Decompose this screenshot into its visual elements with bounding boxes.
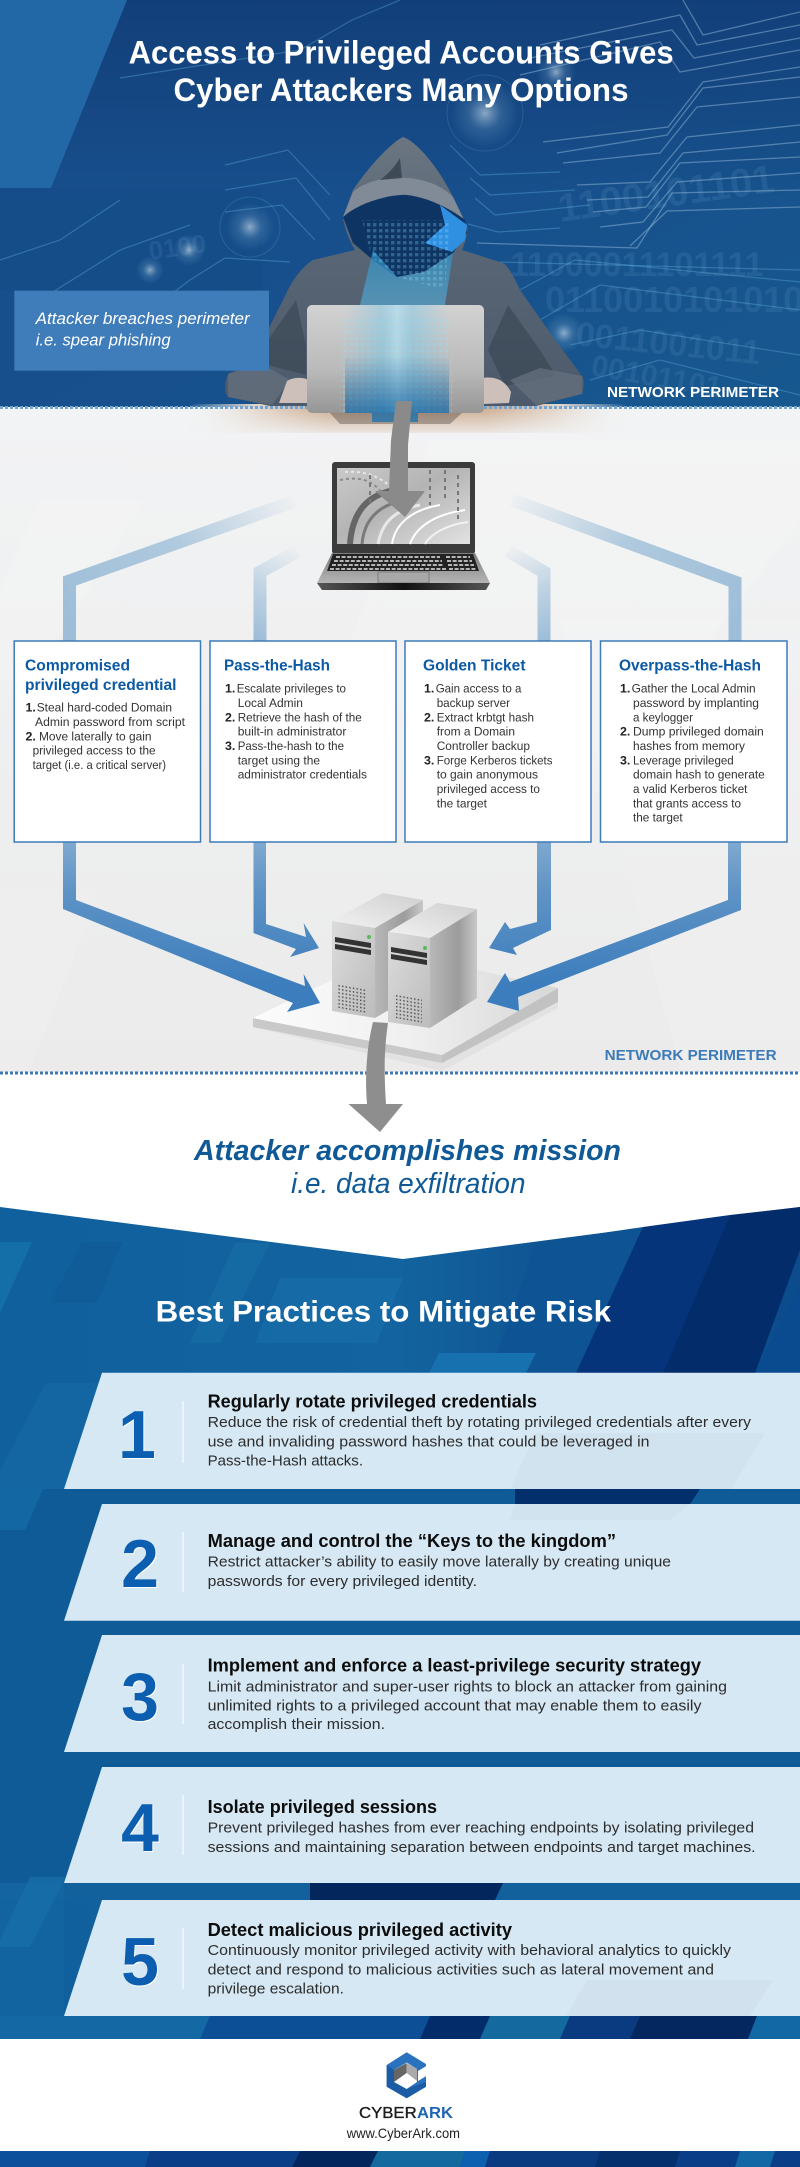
practice text 2: Manage and control the “Keys to the kingdom” xyxy=(208,1531,616,1551)
card heading: Golden Ticket xyxy=(423,658,526,675)
card steps xyxy=(620,682,765,825)
card steps: from a Domain xyxy=(437,725,515,739)
card steps xyxy=(225,682,367,782)
card steps: target using the xyxy=(238,753,320,767)
logo wordmark: CYBER xyxy=(359,2105,417,2122)
divider: bottom network perimeter xyxy=(0,1072,800,1074)
number 3: 3 xyxy=(121,1659,159,1735)
card steps: Pass-the-hash to the xyxy=(238,739,344,753)
practice row 2 xyxy=(64,1504,800,1621)
practice row 1 xyxy=(64,1373,800,1489)
card steps xyxy=(26,701,186,772)
practice text 5 xyxy=(208,1920,732,1998)
card steps: Steal hard-coded Domain xyxy=(37,701,172,715)
card steps: Escalate privileges to xyxy=(237,682,346,696)
practice text 3: accomplish their mission. xyxy=(208,1716,385,1733)
arrow: breach into laptop xyxy=(375,401,425,517)
practice row 3 xyxy=(64,1635,800,1752)
icon: compromised laptop xyxy=(317,462,490,590)
footer strip xyxy=(0,2151,800,2167)
practice text 3 xyxy=(208,1656,727,1733)
card steps: Local Admin xyxy=(238,696,303,710)
hands xyxy=(279,378,309,403)
arrow: exfiltration xyxy=(348,1022,403,1132)
card heading xyxy=(25,658,176,694)
panel: attacker header xyxy=(0,0,800,407)
card heading: privileged credential xyxy=(25,677,176,694)
panel: network interior xyxy=(0,408,800,1072)
card steps: Admin password from script xyxy=(35,715,186,729)
card steps: the target xyxy=(437,796,488,810)
card steps: administrator credentials xyxy=(238,768,367,782)
callout: attacker accomplishes mission: Attacker accomplishes mission xyxy=(193,1135,621,1167)
card steps: target (i.e. a critical server) xyxy=(33,758,166,772)
card steps: built-in administrator xyxy=(238,725,346,739)
card steps: 3. xyxy=(620,753,630,767)
card steps: 2. xyxy=(424,710,434,724)
callout: attacker accomplishes mission: i.e. data exfiltration xyxy=(291,1168,526,1200)
card steps: a valid Kerberos ticket xyxy=(633,782,748,796)
practice text 1: Reduce the risk of credential theft by rotating privileged credentials after every xyxy=(208,1414,752,1431)
icon: hooded hacker at laptop xyxy=(190,137,625,433)
panel: mission area xyxy=(0,1072,800,1212)
server two xyxy=(388,903,477,938)
connectors: laptop to attack cards xyxy=(70,500,735,642)
card steps: 1. xyxy=(26,701,36,715)
card heading: Compromised xyxy=(25,658,130,675)
logo wordmark xyxy=(359,2105,453,2122)
practice text 1: use and invaliding password hashes that could be leveraged in xyxy=(208,1434,650,1451)
card steps: 1. xyxy=(424,682,434,696)
practice text 5: detect and respond to malicious activities such as lateral movement and xyxy=(208,1962,714,1979)
card steps: 1. xyxy=(620,682,630,696)
card steps: 2. xyxy=(620,725,630,739)
heading: best practices: Best Practices to Mitigate Risk xyxy=(156,1296,611,1329)
practice text 1: Pass-the-Hash attacks. xyxy=(208,1453,363,1470)
card: overpass-the-hash xyxy=(600,641,787,842)
laptop lid xyxy=(307,305,484,413)
practice text 3: Limit administrator and super-user rights to block an attacker from gaining xyxy=(208,1679,727,1696)
number 5: 5 xyxy=(121,1924,159,2000)
circuit board binary digits: 0011001011 xyxy=(574,315,762,372)
circuit board binary digits xyxy=(147,157,800,405)
table xyxy=(190,404,625,433)
card steps: hashes from memory xyxy=(633,739,746,753)
card steps: Forge Kerberos tickets xyxy=(437,753,552,767)
card steps: to gain anonymous xyxy=(437,768,538,782)
card steps: Retrieve the hash of the xyxy=(238,710,362,724)
practice text 4 xyxy=(208,1797,756,1856)
label: bottom network perimeter: NETWORK PERIMETER xyxy=(605,1047,777,1064)
card steps: 3. xyxy=(225,739,235,753)
callout: attacker breaches perimeter: Attacker breaches perimeter xyxy=(35,309,251,328)
callout: attacker breaches perimeter xyxy=(14,291,269,371)
practice text 5: Detect malicious privileged activity xyxy=(208,1920,512,1940)
practice row 5 xyxy=(64,1900,800,2016)
arrow: card four to servers xyxy=(487,842,741,1011)
card steps: backup server xyxy=(437,696,510,710)
practice text 2 xyxy=(208,1531,671,1590)
practice text 2: passwords for every privileged identity. xyxy=(208,1573,477,1590)
card steps: 3. xyxy=(424,753,434,767)
title: Access to Privileged Accounts Gives xyxy=(129,34,674,70)
divider: top network perimeter xyxy=(0,406,800,409)
card steps: Extract krbtgt hash xyxy=(437,710,534,724)
practice text 4: Isolate privileged sessions xyxy=(208,1797,437,1817)
arrow: card two to servers xyxy=(254,842,319,957)
title: Cyber Attackers Many Options xyxy=(174,72,628,108)
card steps: Leverage privileged xyxy=(633,753,734,767)
arrow: card three to servers xyxy=(489,842,551,955)
glowing face xyxy=(343,195,467,277)
hoodie body xyxy=(225,137,584,406)
practice text 3: Implement and enforce a least-privilege security strategy xyxy=(208,1656,701,1676)
practice text 3: unlimited rights to a privileged account that may enable them to easily xyxy=(208,1698,702,1715)
logo wordmark: ARK xyxy=(417,2105,453,2122)
callout: attacker accomplishes mission xyxy=(193,1135,621,1200)
circuit board binary digits: 00101101 xyxy=(589,349,724,405)
practice text 1 xyxy=(208,1392,752,1470)
card steps: Controller backup xyxy=(437,739,530,753)
label: top network perimeter: NETWORK PERIMETER xyxy=(607,384,779,401)
title xyxy=(129,34,674,108)
panel: best practices background xyxy=(0,1207,800,2039)
card steps: 1. xyxy=(225,682,235,696)
card: pass-the-hash xyxy=(210,641,396,842)
card: golden ticket xyxy=(405,641,591,842)
practice text 5: Continuously monitor privileged activity with behavioral analytics to quickly xyxy=(208,1942,732,1959)
practice text 4: sessions and maintaining separation between endpoints and target machines. xyxy=(208,1839,756,1856)
card heading: Overpass-the-Hash xyxy=(619,658,761,675)
circuit board binary digits: 0110010101010 xyxy=(545,279,800,320)
card steps: a keylogger xyxy=(633,710,693,724)
card steps: Gather the Local Admin xyxy=(632,682,756,696)
number 1: 1 xyxy=(118,1397,156,1473)
icon: cyberark logo xyxy=(387,2052,428,2098)
server one xyxy=(332,893,423,928)
card steps: privileged access to xyxy=(437,782,540,796)
card steps: Dump privileged domain xyxy=(633,725,764,739)
practice text 5: privilege escalation. xyxy=(208,1981,344,1998)
circuit board binary digits: 11000011101111 xyxy=(510,246,763,284)
card: compromised privileged credential xyxy=(14,641,201,842)
practice text 2: Restrict attacker’s ability to easily move laterally by creating unique xyxy=(208,1554,671,1571)
card steps: domain hash to generate xyxy=(633,768,765,782)
panel: footer xyxy=(0,2039,800,2151)
number 2: 2 xyxy=(121,1526,159,1602)
card steps: that grants access to xyxy=(633,796,741,810)
icon: servers xyxy=(332,893,477,1028)
card steps: Move laterally to gain xyxy=(39,729,152,743)
card heading: Pass-the-Hash xyxy=(224,658,330,675)
card steps: privileged access to the xyxy=(33,744,156,758)
circuit board binary digits: 1100101101 xyxy=(555,157,777,231)
card steps: Gain access to a xyxy=(436,682,521,696)
website url: www.CyberArk.com xyxy=(346,2125,460,2141)
circuit board binary digits: 0100 xyxy=(147,228,208,266)
server platform xyxy=(253,951,558,1071)
number 4: 4 xyxy=(121,1790,159,1866)
arrow: card one to servers xyxy=(63,842,320,1012)
practice row 4 xyxy=(64,1767,800,1883)
card steps: the target xyxy=(633,811,683,825)
callout: attacker breaches perimeter: i.e. spear phishing xyxy=(36,331,171,350)
practice text 1: Regularly rotate privileged credentials xyxy=(208,1392,537,1412)
practice text 4: Prevent privileged hashes from ever reaching endpoints by isolating privileged xyxy=(208,1820,754,1837)
card steps: password by implanting xyxy=(633,696,759,710)
card steps: 2. xyxy=(26,729,36,743)
card steps xyxy=(424,682,552,810)
card steps: 2. xyxy=(225,710,235,724)
